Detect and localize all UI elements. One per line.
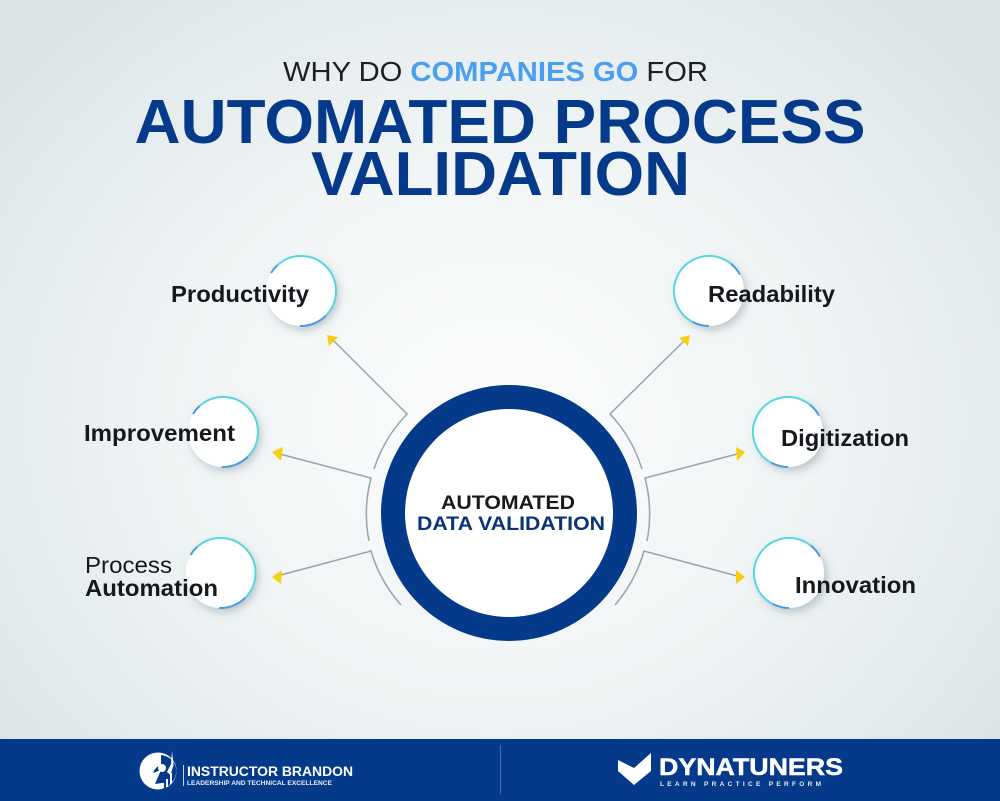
node: productivity: Productivity [171,281,309,307]
arrow: to digitization [645,447,745,541]
arrow: to improvement [272,447,371,541]
node: process automation [85,524,270,622]
central label [417,493,605,535]
node: process automation: Process [85,552,172,578]
node: improvement [84,383,272,481]
central circle [381,385,637,641]
logo: instructor brandon [140,751,353,790]
node: readability [660,242,835,340]
node: innovation [740,524,916,622]
node: process automation: Automation [85,575,218,601]
arrow: to process automation [272,551,401,605]
central label: AUTOMATED [441,493,575,514]
title line: automated process: AUTOMATED PROCESS [134,88,865,157]
node: productivity [171,242,350,340]
central label: DATA VALIDATION [417,514,605,535]
arrow: to productivity [327,335,407,469]
node: improvement: Improvement [84,420,235,446]
node: readability: Readability [708,281,835,307]
logo: instructor brandon: LEADERSHIP AND TECHNICAL EXCELLENCE [187,781,332,787]
title [134,56,865,209]
logo: instructor brandon: INSTRUCTOR BRANDON [187,764,353,779]
arrow: to innovation [615,551,745,605]
connector arcs and arrows [272,335,745,605]
node: digitization: Digitization [781,425,909,451]
node: digitization [739,383,909,481]
arrow: to readability [610,335,690,469]
title line: validation: VALIDATION [311,140,690,209]
footer band [0,739,1000,801]
logo: dynatuners [618,753,843,788]
logo: dynatuners: DYNATUNERS [659,754,843,781]
icon: instructor brandon emblem [140,751,176,790]
title line: why do companies go for: WHY DO COMPANIES GO FOR [283,56,708,87]
node: innovation: Innovation [795,572,916,598]
icon: check mark shield [618,753,651,785]
logo: dynatuners: LEARN PRACTICE PERFORM [660,781,821,788]
